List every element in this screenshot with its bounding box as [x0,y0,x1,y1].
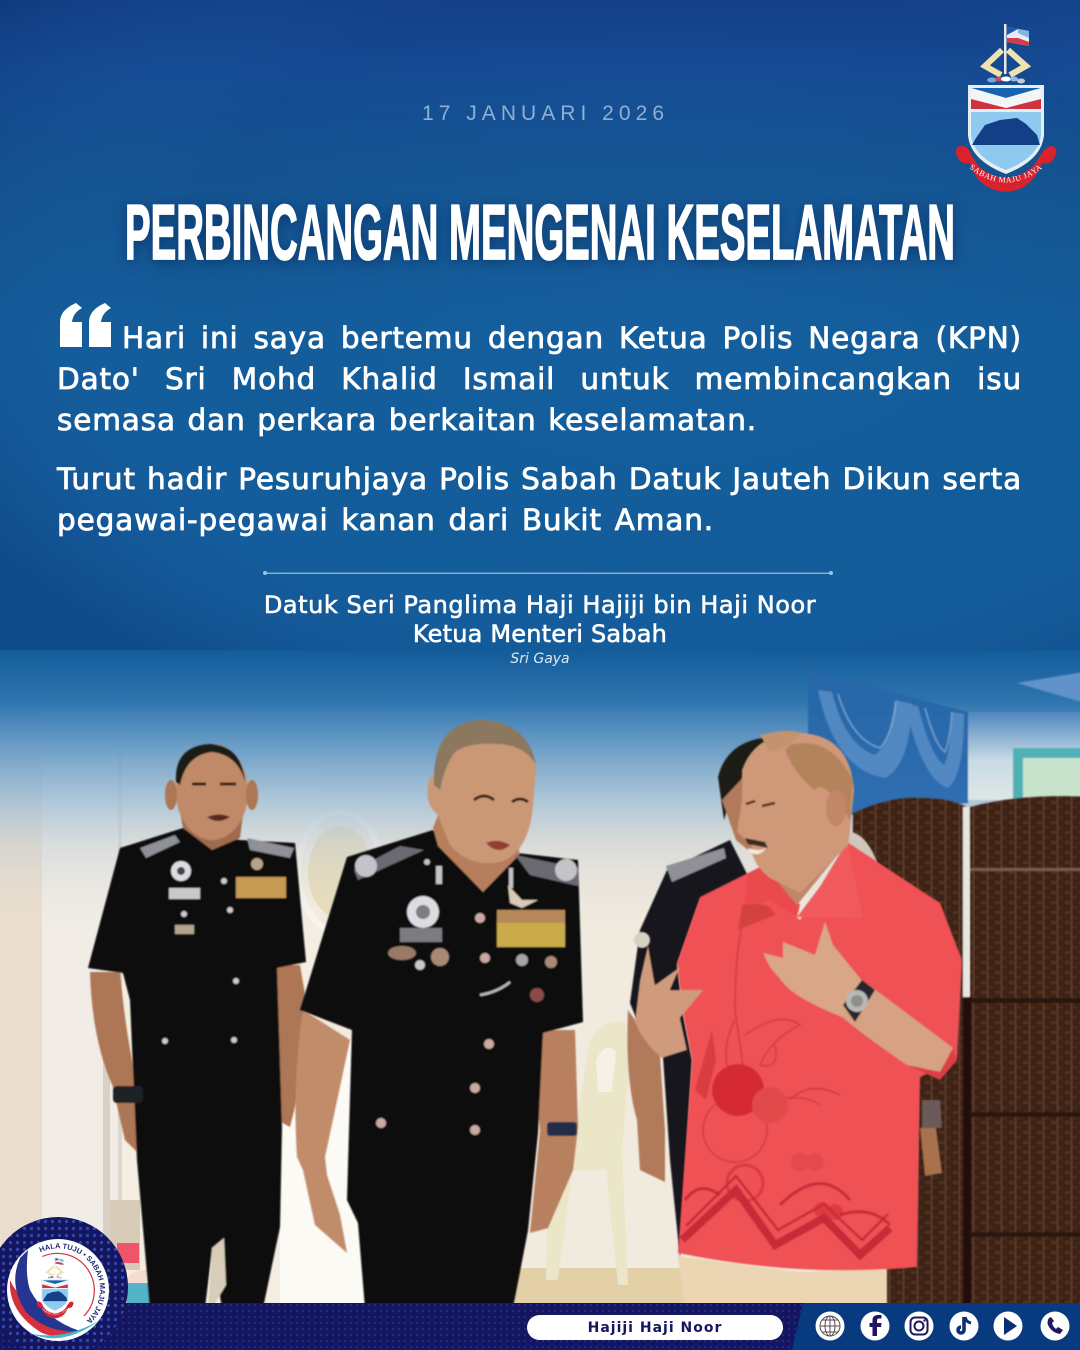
attribution: Datuk Seri Panglima Haji Hajiji bin Haji Noor [264,591,816,619]
crest: Sabah coat of arms [956,24,1056,192]
photo: woven room divider [850,796,1080,1310]
person: officer behind [627,737,942,1258]
icon: phone [1040,1312,1070,1340]
photo: window and drapes at right [808,670,1080,815]
quote text block: semasa dan perkara berkaitan keselamatan. [57,403,757,437]
quote text block: pegawai-pegawai kanan dari Bukit Aman. [57,503,714,537]
beads [987,76,1025,84]
flag pole [1004,24,1006,74]
icon: instagram [904,1312,934,1340]
ribbon [956,146,1056,192]
icon: youtube play [994,1312,1022,1340]
attribution: Sri Gaya [510,651,570,667]
shirt embroidery [682,904,890,1255]
person: officer in the centre [295,720,583,1308]
quote text block: Turut hadir Pesuruhjaya Polis Sabah Datuk Jauteh Dikun serta [57,462,1022,496]
icon: website globe [816,1312,844,1340]
date: 17 JANUARI 2026 [422,102,664,125]
ribbon: SABAH MAJU JAYA [970,164,1042,183]
person: man in red shirt [634,731,962,1308]
icon: tiktok [950,1312,978,1340]
person: officer on the left [88,744,306,1308]
flag [1007,27,1029,46]
footer name pill [527,1315,783,1340]
photo: room background [0,652,1080,1307]
icon: facebook [860,1312,890,1340]
divider [263,571,833,575]
icon: opening quote mark [60,303,111,347]
hands [985,50,1026,75]
shield [968,85,1044,174]
footer name pill: Hajiji Haji Noor [588,1320,722,1336]
round logo badge: HALA TUJU • SABAH MAJU JAYA [39,1243,106,1323]
attribution: Ketua Menteri Sabah [413,620,667,648]
quote text block: Dato' Sri Mohd Khalid Ismail untuk membincangkan isu [57,362,1022,396]
round logo badge [0,1217,128,1350]
quote text block [56,321,1022,537]
photo: top fade into blue [0,650,1080,930]
footer bar [0,1303,1080,1350]
attribution [264,591,816,667]
quote text block: Hari ini saya bertemu dengan Ketua Polis Negara (KPN) [122,321,1022,355]
